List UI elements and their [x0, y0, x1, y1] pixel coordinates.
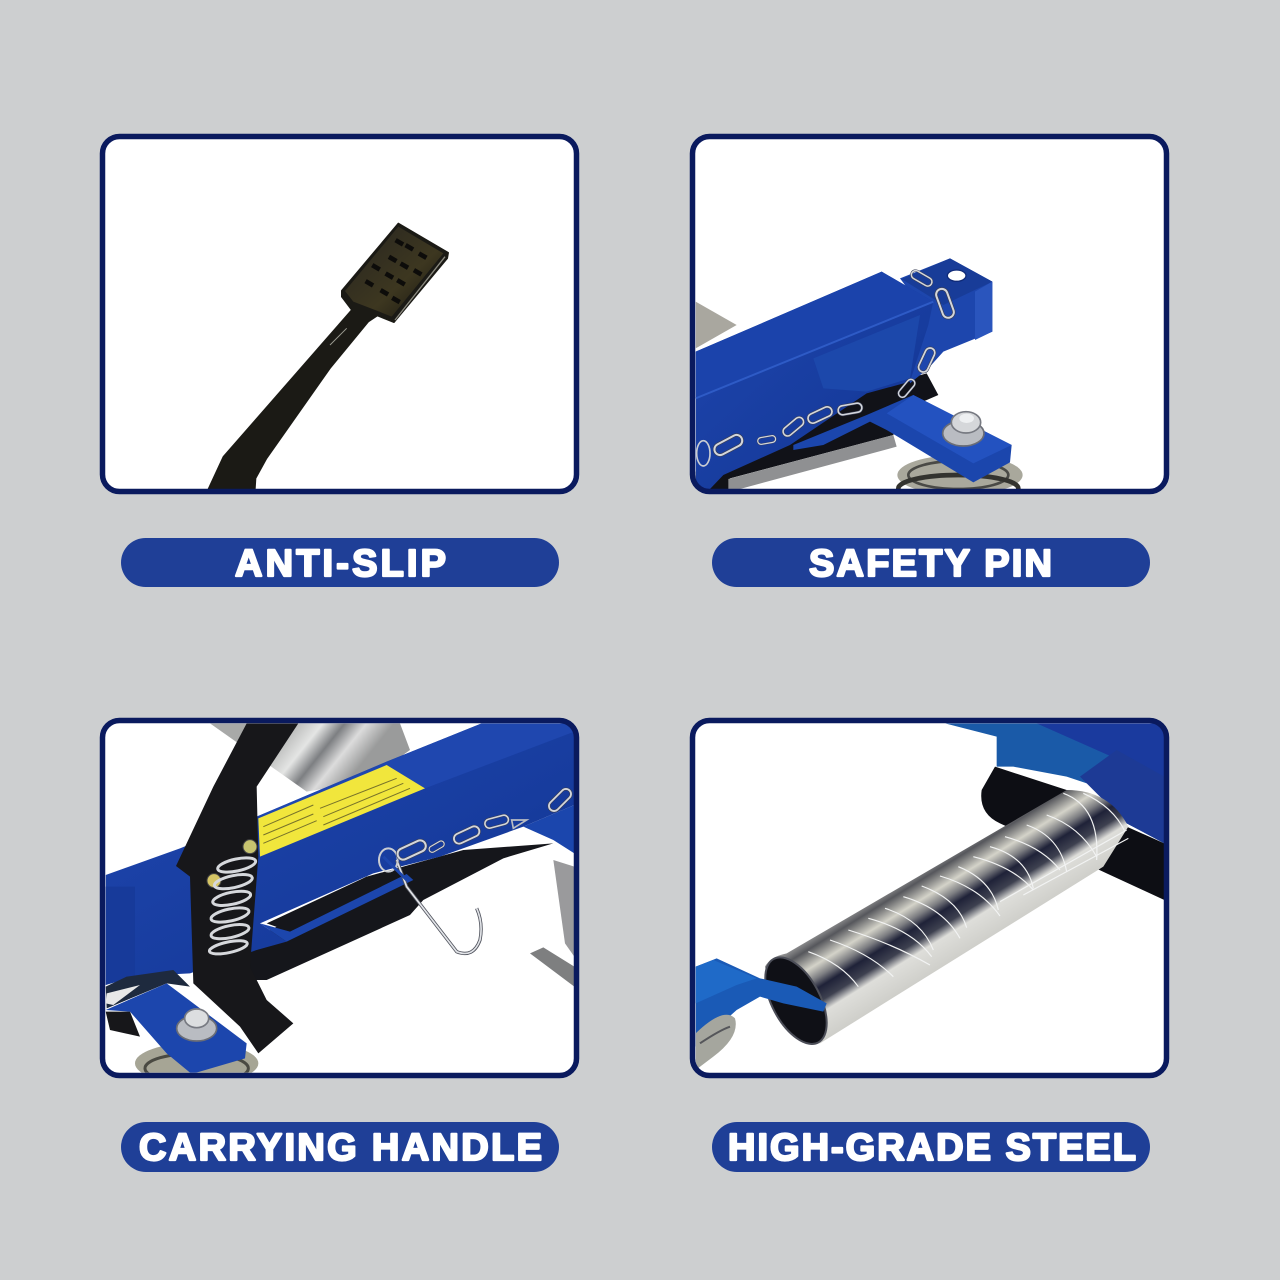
label: high-grade steel: HIGH-GRADE STEEL	[728, 1127, 1136, 1169]
panel: carrying handle	[102, 720, 576, 1084]
panel: anti-slip	[102, 136, 576, 492]
label: anti-slip	[121, 538, 559, 587]
photo: anti-slip pedal	[208, 223, 448, 489]
label: anti-slip: ANTI-SLIP	[235, 543, 446, 585]
panel: safety pin	[692, 136, 1166, 502]
label: carrying handle: CARRYING HANDLE	[139, 1127, 542, 1169]
photo: safety pin chain on blue bar	[696, 258, 1023, 502]
photo: steel tube	[696, 723, 1164, 1070]
label: safety pin	[712, 538, 1150, 587]
photo: carrying handle and hook	[106, 723, 574, 1084]
panel: high-grade steel	[692, 720, 1166, 1076]
label: safety pin: SAFETY PIN	[809, 543, 1052, 585]
